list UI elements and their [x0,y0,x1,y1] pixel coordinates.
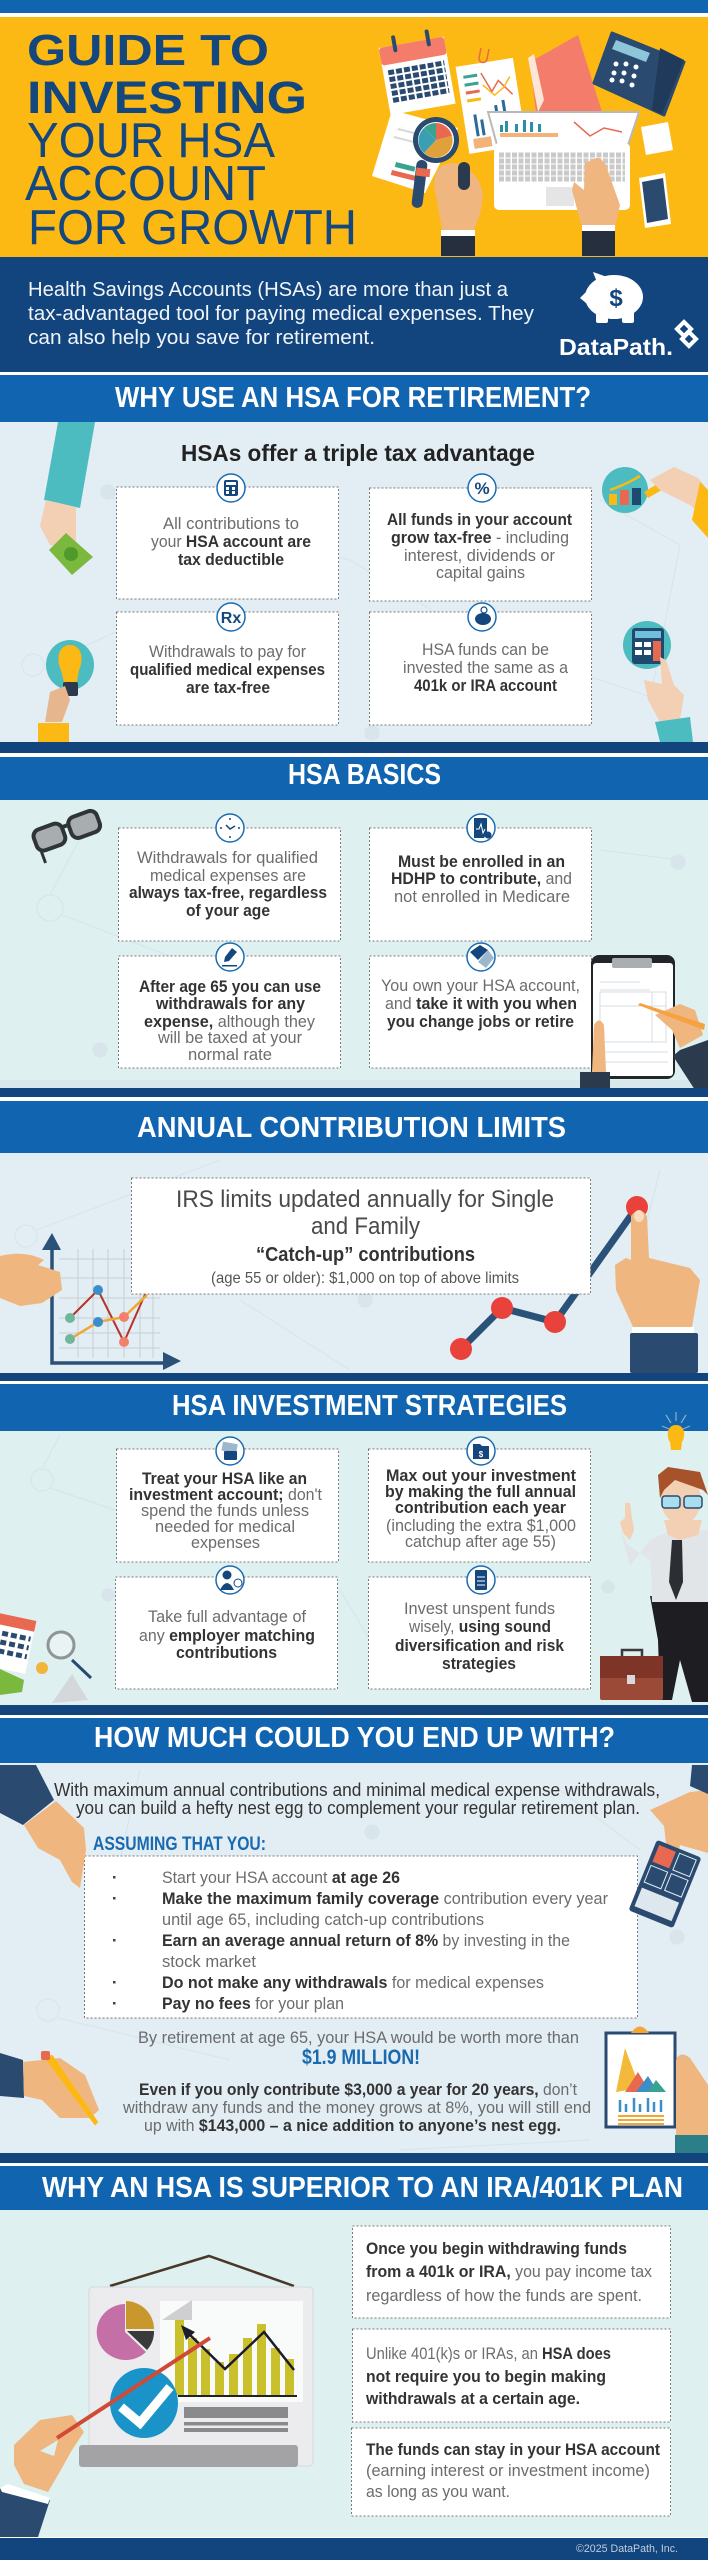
heading: WHY USE AN HSA FOR RETIREMENT? [115,382,591,414]
panel: how much could you end up with [0,1718,708,2153]
card: max out: (including the extra $1,000 [386,1516,576,1535]
icon: dollar folder: $ [479,1450,484,1459]
card: invest unspent funds: strategies [442,1654,516,1673]
illustration: businessman [620,1467,708,1702]
desk illustration [372,27,684,256]
note block [641,122,673,155]
icon: piggy bank logo [580,272,643,323]
assumptions box: Earn an average annual return of 8% by investing in the [162,1931,570,1950]
card: max out [368,1437,590,1562]
card: tax deductible: tax deductible [178,550,284,569]
illustration: presentation board [79,2256,313,2467]
card: tax deductible: your HSA account are [151,532,311,551]
card: after age 65 [118,943,340,1068]
illustration: lightbulb [662,1412,690,1450]
callout: IRS limits: (age 55 or older): $1,000 on top of above limits [211,1270,519,1287]
assumptions box [84,1856,638,2018]
card: after age 65: expense, although they [144,1012,315,1031]
illustration: briefcase [600,1650,663,1700]
illustration: hand with pointer [0,2338,210,2537]
card: funds can stay: as long as you want. [366,2482,510,2501]
copyright: ©2025 DataPath, Inc. [576,2543,678,2555]
title: ACCOUNT [25,157,266,211]
callout: IRS limits: “Catch-up” contributions [256,1244,475,1266]
card: income tax: Once you begin withdrawing funds [366,2239,627,2258]
card: invested like 401k: HSA funds can be [422,640,549,659]
card: funds can stay: The funds can stay in your HSA account [366,2440,660,2459]
card: always tax-free: always tax-free, regardless [129,883,327,902]
illustration: pointing hand top left [0,1765,86,1888]
card: grow tax-free [370,474,592,601]
result statement: up with $143,000 – a nice addition to anyone’s nest egg. [144,2116,561,2135]
assumptions box: Pay no fees for your plan [162,1994,344,2013]
card: qualified medical expenses: are tax-free [186,678,270,697]
intro statement: With maximum annual contributions and minimal medical expense withdrawals, [54,1780,660,1800]
panel: why use an HSA for retirement [0,375,708,742]
icon: clock [216,814,244,842]
icon: percent: % [474,479,490,498]
card: you own your account: and take it with you when [385,994,577,1013]
divider band [0,1705,708,1715]
result statement: withdraw any funds and the money grows at 8%, you will still end [122,2098,591,2117]
card: tax deductible [116,474,338,599]
icon: document [467,1566,495,1594]
divider band [0,2153,708,2163]
check mark badge [110,2368,178,2438]
illustration: lightbulb in hand [38,640,94,742]
subheading: assuming: ASSUMING THAT YOU: [93,1834,266,1855]
illustration: hand with pencil [0,2051,99,2124]
card: qualified medical expenses [116,603,338,725]
intro band [0,257,708,372]
divider band [0,1373,708,1381]
card: qualified medical expenses: Withdrawals to pay for [149,642,306,661]
card: income tax: regardless of how the funds are spent. [366,2286,642,2305]
assumptions box: Make the maximum family coverage contribution every year [162,1889,608,1908]
heading: HSA BASICS [288,759,441,791]
callout: IRS limits: IRS limits updated annually for Single [176,1186,554,1213]
card: no required withdrawals: not require you to begin making [366,2367,606,2386]
title: YOUR HSA [27,114,275,168]
card: after age 65: withdrawals for any [155,994,306,1013]
intro text: tax-advantaged tool for paying medical expenses. They [28,303,534,325]
illustration: calculator with pointing hand [629,1765,708,1928]
divider band [0,742,708,753]
card: invest unspent funds: diversification and risk [395,1636,564,1655]
illustration: calculator with finger [623,621,693,742]
card: must be enrolled: HDHP to contribute, and [391,869,572,888]
card: must be enrolled: not enrolled in Medicare [394,887,570,906]
card: always tax-free: Withdrawals for qualified [137,848,318,867]
result statement: By retirement at age 65, your HSA would be worth more than [138,2028,579,2047]
card: max out: contribution each year [395,1498,566,1517]
title: FOR GROWTH [28,201,357,255]
icon: Rx [217,603,245,631]
card: income tax [352,2226,670,2318]
logo: DataPath [559,322,696,360]
illustration: growth chart with pencil [602,467,708,538]
card: grow tax-free: grow tax-free - including [391,528,569,547]
card: must be enrolled: Must be enrolled in an [398,852,565,871]
icon: calculator [217,474,245,502]
card: after age 65: After age 65 you can use [139,977,321,996]
result statement: $1.9 MILLION! [302,2046,420,2069]
card: treat like investment: needed for medical [155,1517,295,1536]
icon: money wallet [216,1437,244,1465]
laptop [488,112,639,145]
left paper [372,110,458,193]
logo: DataPath: DataPath. [559,334,673,360]
panel: why an HSA is superior [0,2166,708,2537]
card: after age 65: will be taxed at your [157,1028,302,1047]
icon: medical clipboard [467,814,495,842]
card: max out: by making the full annual [385,1482,576,1501]
card: no required withdrawals: Unlike 401(k)s or IRAs, an HSA does [366,2344,611,2363]
assumptions box: until age 65, including catch-up contributions [162,1910,484,1929]
card: funds can stay: (earning interest or investment income) [366,2461,650,2480]
card: treat like investment [116,1437,338,1562]
card: qualified medical expenses: qualified medical expenses [130,660,325,679]
divider band [0,1088,708,1097]
line chart with hand [0,1233,181,1370]
calendar [377,27,456,115]
panel: HSA basics [0,757,708,1090]
icon: person and dollar [216,1566,244,1594]
card: treat like investment: expenses [191,1533,260,1552]
smartphone [639,173,671,228]
illustration: clipboard with pencil hand [580,955,708,1090]
icon: piggy bank logo: $ [609,285,623,312]
card: invested like 401k: invested the same as a [403,658,569,677]
icon: piggy [468,603,496,631]
card: grow tax-free: All funds in your account [387,510,572,529]
panel: HSA investment strategies [0,1384,708,1705]
magnifier [411,159,428,208]
card: no required withdrawals [352,2329,670,2422]
title: GUIDE TO [27,26,269,75]
card: treat like investment: Treat your HSA like an [142,1469,307,1488]
card: employer matching: Take full advantage of [148,1607,306,1626]
illustration: eyeglasses [32,809,106,864]
header banner [0,0,708,257]
title [25,26,357,255]
bar chart [175,2320,294,2395]
card: max out: catchup after age 55) [405,1532,556,1551]
trend line with pointing hand [450,1196,700,1373]
intro text: can also help you save for retirement. [28,327,375,349]
hand on keyboard [572,158,620,256]
card: invest unspent funds: Invest unspent funds [404,1599,555,1618]
report paper [456,58,527,154]
assumptions box: stock market [162,1952,256,1971]
card: always tax-free: medical expenses are [150,866,306,885]
folder [530,35,602,113]
callout: IRS limits: and Family [311,1213,420,1240]
card: you own your account [370,943,592,1068]
card: employer matching [116,1566,338,1689]
heading: ANNUAL CONTRIBUTION LIMITS [137,1112,566,1144]
card: you own your account: You own your HSA account, [381,976,580,995]
card: income tax: from a 401k or IRA, you pay income tax [366,2262,652,2281]
card: grow tax-free: interest, dividends or [404,546,555,565]
icon: percent [468,474,496,502]
card: invested like 401k [370,603,592,725]
intro statement: you can build a hefty nest egg to complement your regular retirement plan. [76,1798,640,1818]
card: treat like investment: spend the funds unless [141,1501,309,1520]
card: max out: Max out your investment [386,1466,576,1485]
illustration: hand holding money [40,422,95,575]
icon: Rx: Rx [221,610,241,627]
callout: IRS limits [132,1178,590,1294]
illustration: report clipboard with hand [606,2026,708,2153]
icon: dollar folder [467,1437,495,1465]
result statement [122,2028,591,2135]
title: INVESTING [27,72,307,123]
panel: annual contribution limits [0,1101,708,1373]
telephone [594,33,684,115]
pie chart [97,2301,154,2360]
card: treat like investment: investment account; don't [129,1485,322,1504]
intro statement [54,1780,660,1818]
icon: handshake [467,943,495,971]
intro text [28,279,534,349]
footer band [0,2538,708,2560]
subheading: HSAs offer a triple tax advantage [181,440,535,466]
card: after age 65: normal rate [188,1045,272,1064]
heading: HOW MUCH COULD YOU END UP WITH? [94,1722,615,1754]
card: invest unspent funds [368,1566,590,1689]
icon: pen signing [216,943,244,971]
result statement: Even if you only contribute $3,000 a year for 20 years, don’t [139,2080,577,2099]
paper clip [479,48,489,63]
card: invested like 401k: 401k or IRA account [414,676,557,695]
assumptions box: Do not make any withdrawals for medical expenses [162,1973,544,1992]
assumptions box: Start your HSA account at age 26 [162,1868,400,1887]
hand with mouse [434,162,482,256]
card: you own your account: you change jobs or retire [387,1012,574,1031]
card: always tax-free: of your age [186,901,270,920]
card: always tax-free [118,814,340,941]
card: tax deductible: All contributions to [163,514,299,533]
card: employer matching: any employer matching [139,1626,315,1645]
heading: HSA INVESTMENT STRATEGIES [172,1390,567,1422]
illustration: calendar, magnifier and money [0,1612,91,1703]
card: no required withdrawals: withdrawals at a certain age. [365,2389,580,2408]
card: invest unspent funds: wisely, using sound [408,1617,551,1636]
card: must be enrolled [370,814,592,941]
card: grow tax-free: capital gains [436,563,525,582]
intro text: Health Savings Accounts (HSAs) are more than just a [28,279,509,301]
card: employer matching: contributions [176,1643,277,1662]
card: funds can stay [352,2428,670,2516]
